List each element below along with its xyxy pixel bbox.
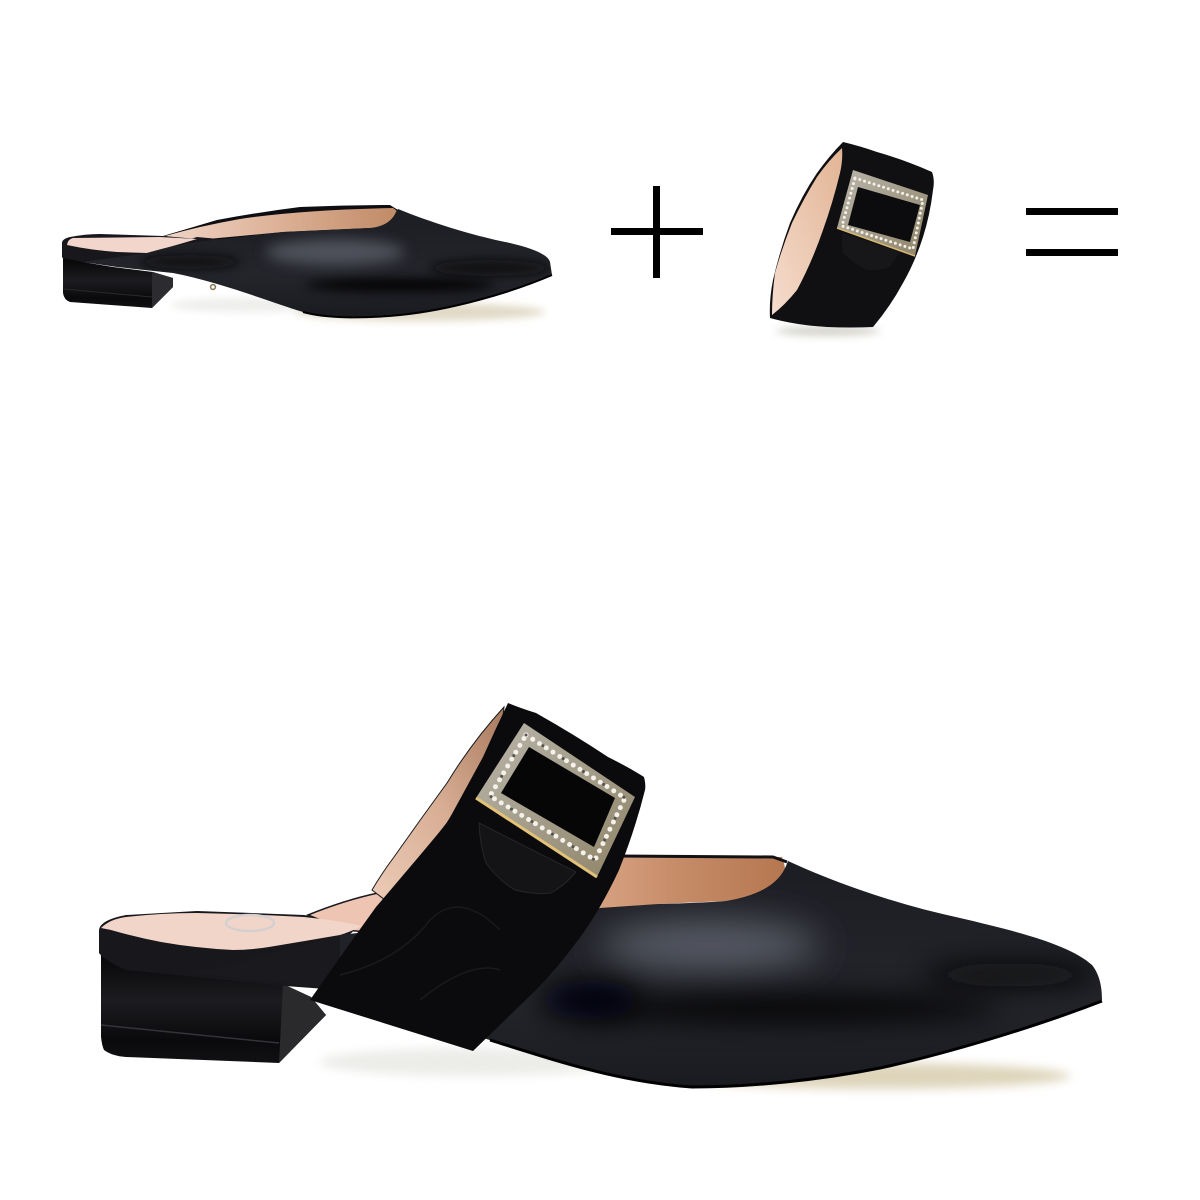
- black leather upper: [340, 861, 1102, 1087]
- top strap with rhinestone buckle: [770, 142, 934, 336]
- strap: [310, 703, 645, 1051]
- top row: equation of shoe plus strap: [62, 142, 1118, 336]
- insole: [101, 913, 362, 950]
- buckle centre band: [501, 747, 615, 847]
- bottom: combined shoe with strap attached: [99, 703, 1102, 1089]
- infographic canvas: [62, 142, 1118, 1094]
- ground shadow: [320, 1048, 1070, 1089]
- strap keeper tab: [479, 823, 576, 894]
- heel block: [101, 950, 326, 1063]
- equals sign: [1026, 208, 1118, 256]
- plus sign: [611, 186, 703, 278]
- quarter behind strap: [190, 908, 600, 1040]
- rear lining sliver: [308, 893, 420, 935]
- heel counter: [99, 911, 360, 990]
- buckle frame with rhinestones: [476, 723, 635, 877]
- opening lining: [585, 856, 787, 912]
- top shoe: plain black mule: [62, 205, 552, 321]
- strap inner lining: [372, 707, 504, 900]
